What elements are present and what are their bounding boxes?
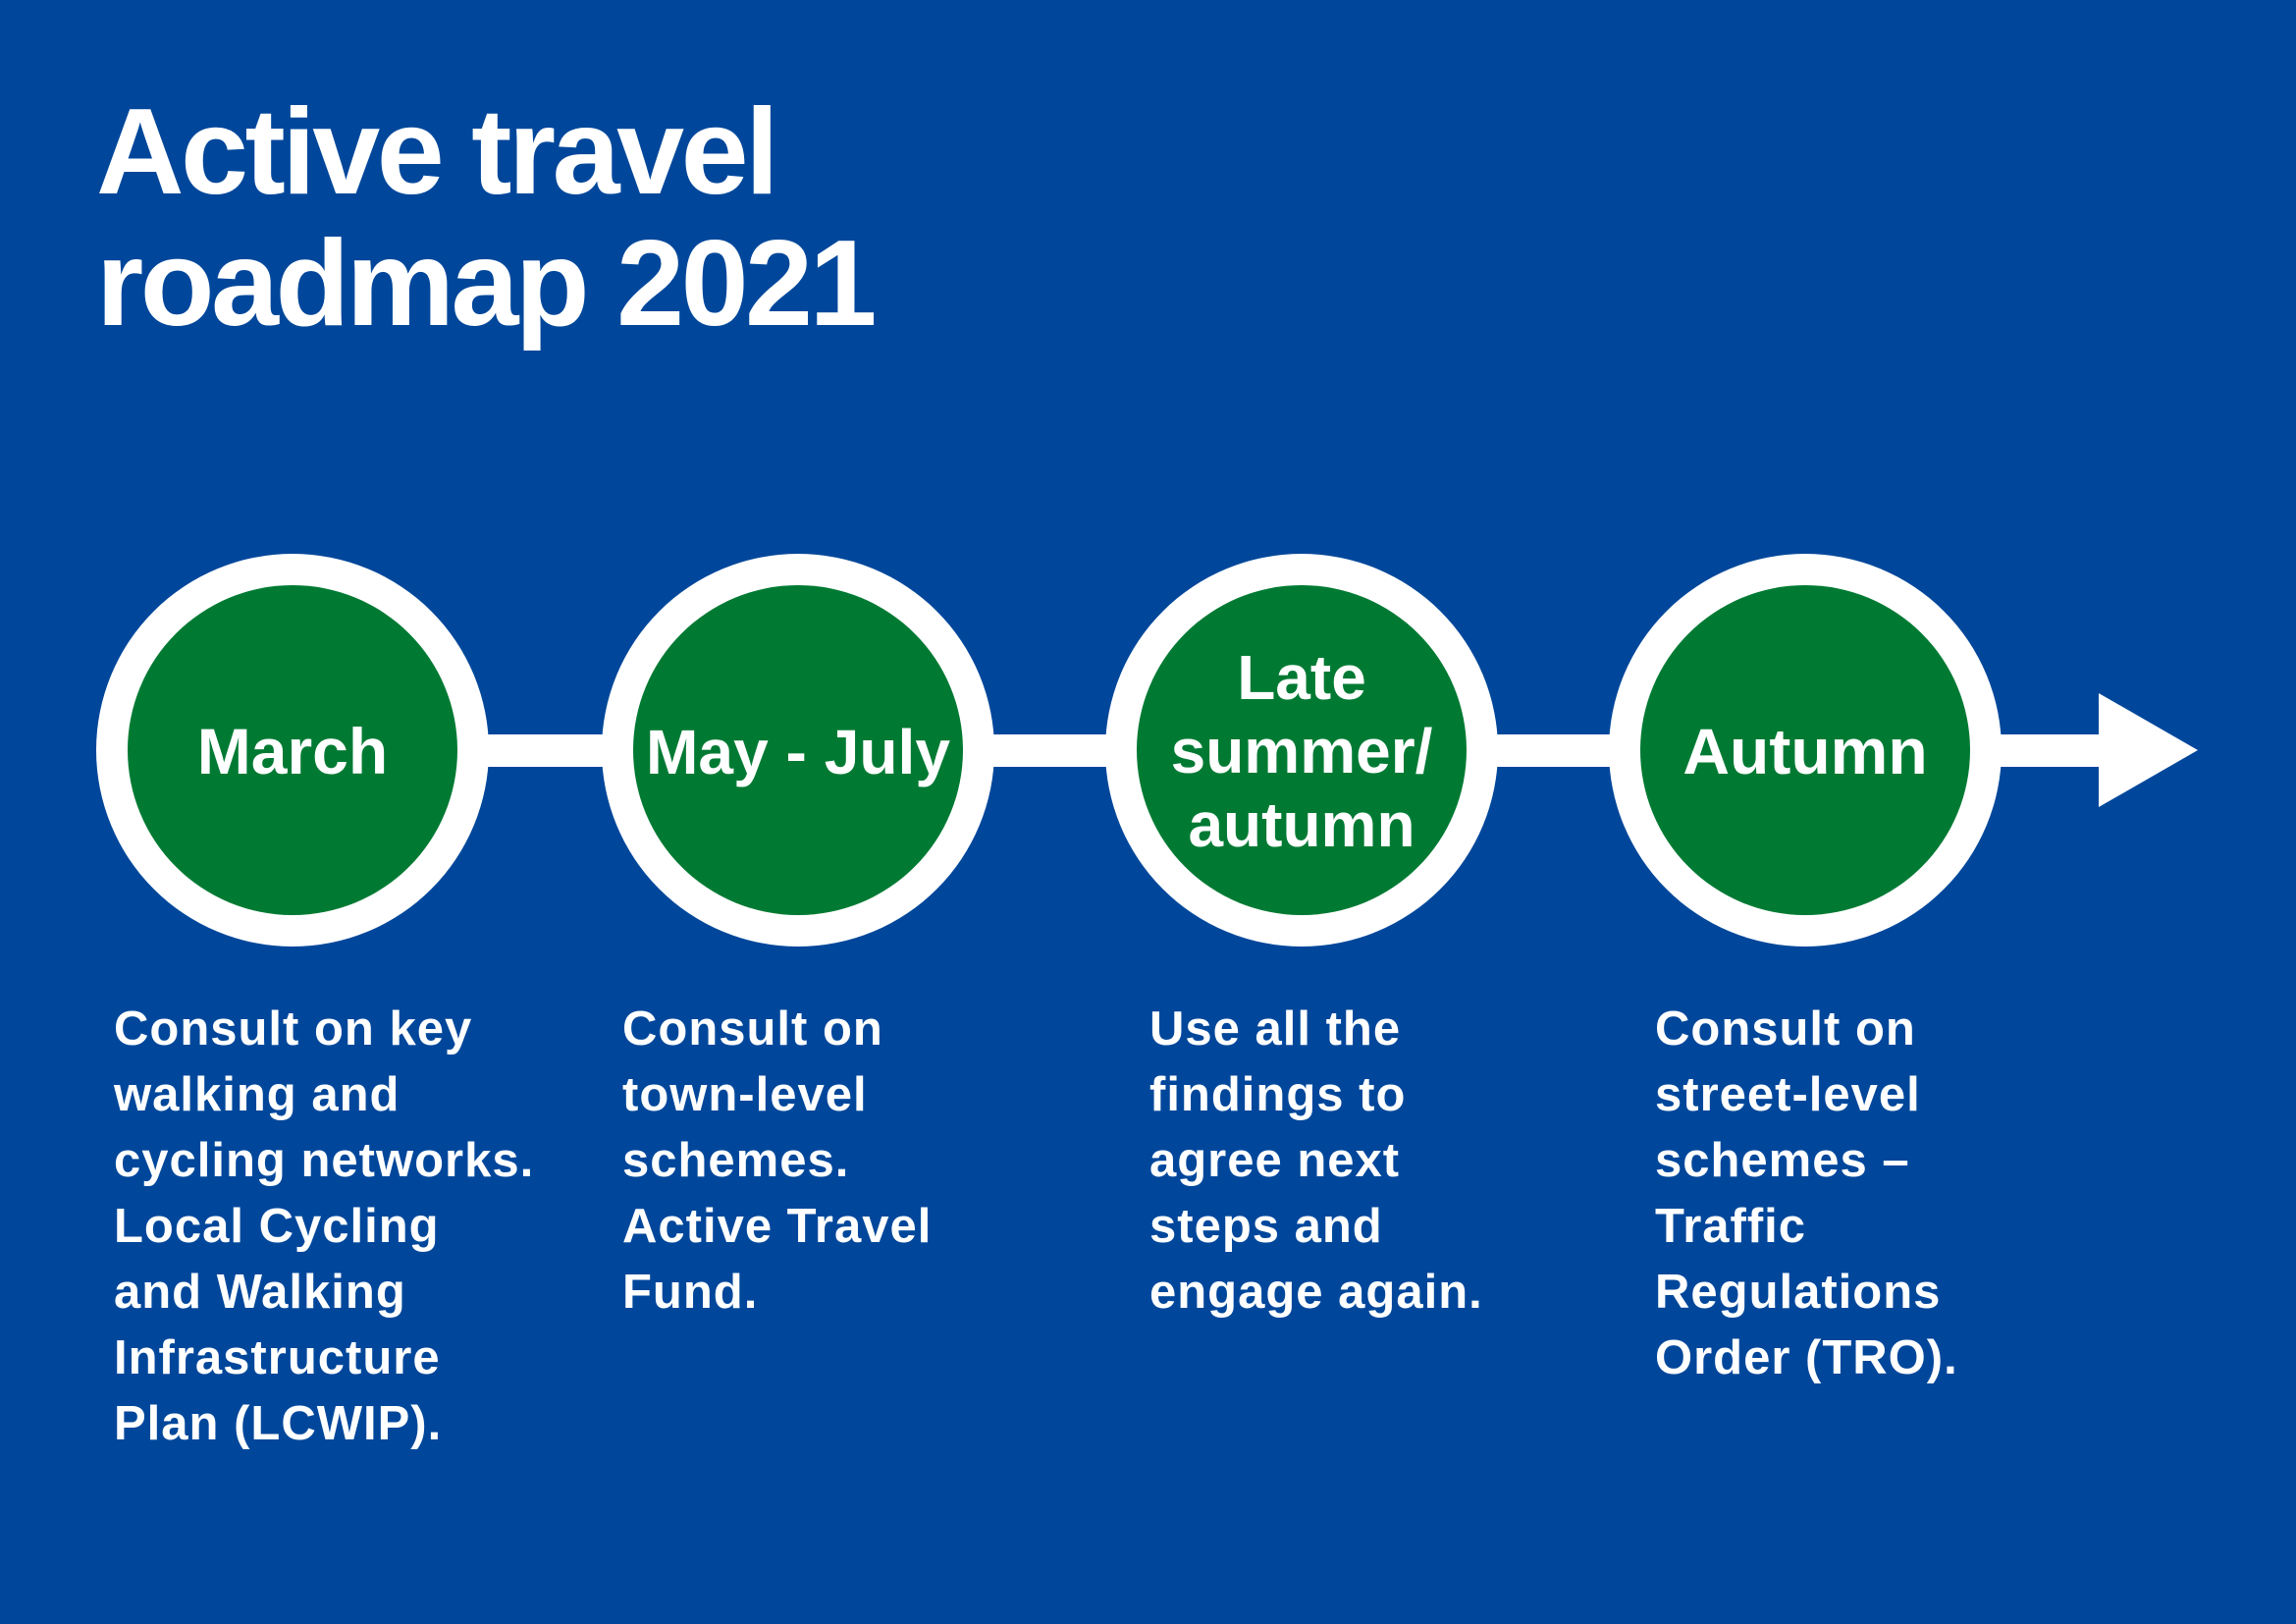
milestone: Late summer/autumn: autumn [1188, 789, 1415, 860]
text: Autumn description: Regulations [1655, 1266, 1941, 1319]
text: Autumn description [1655, 1002, 1958, 1384]
text: Late summer description: agree next [1149, 1134, 1400, 1187]
text: Late summer description [1149, 1002, 1483, 1319]
text: May-July description [622, 1002, 932, 1319]
text: March description [114, 1002, 534, 1450]
text: March description: walking and [114, 1068, 400, 1121]
text: March description: Infrastructure [114, 1331, 441, 1384]
title [96, 84, 874, 352]
text: Late summer description: findings to [1149, 1068, 1406, 1121]
arrow: timeline line [293, 693, 2198, 807]
milestone: March [96, 554, 489, 947]
milestone: May - July [602, 554, 994, 947]
text: Autumn description: Order (TRO). [1655, 1331, 1958, 1384]
milestone: Late summer/autumn: Late [1237, 642, 1366, 713]
text: May-July description: Fund. [622, 1266, 758, 1319]
title: roadmap 2021 [96, 216, 874, 352]
text: March description: Plan (LCWIP). [114, 1397, 442, 1450]
text: May-July description: Consult on [622, 1002, 883, 1056]
text: Late summer description: Use all the [1149, 1002, 1401, 1056]
milestone: May - July: May - July [646, 717, 950, 787]
text: Autumn description: Consult on [1655, 1002, 1916, 1056]
text: Late summer description: steps and [1149, 1200, 1383, 1253]
text: May-July description: Active Travel [622, 1200, 932, 1253]
milestone: Late summer/autumn: summer/ [1171, 716, 1433, 786]
title: Active travel [96, 84, 775, 220]
text: Late summer description: engage again. [1149, 1266, 1483, 1319]
text: May-July description: schemes. [622, 1134, 849, 1187]
text: March description: Consult on key [114, 1002, 472, 1056]
milestone: Autumn [1609, 554, 2002, 947]
text: May-July description: town-level [622, 1068, 868, 1121]
milestone: Late summer/autumn [1105, 554, 1498, 947]
text: March description: and Walking [114, 1266, 406, 1319]
text: March description: cycling networks. [114, 1134, 534, 1187]
text: Autumn description: schemes – [1655, 1134, 1910, 1187]
milestone: March: March [197, 715, 388, 787]
milestone: Autumn: Autumn [1682, 715, 1928, 787]
text: Autumn description: Traffic [1655, 1200, 1806, 1253]
text: Autumn description: street-level [1655, 1068, 1921, 1121]
text: March description: Local Cycling [114, 1200, 440, 1253]
